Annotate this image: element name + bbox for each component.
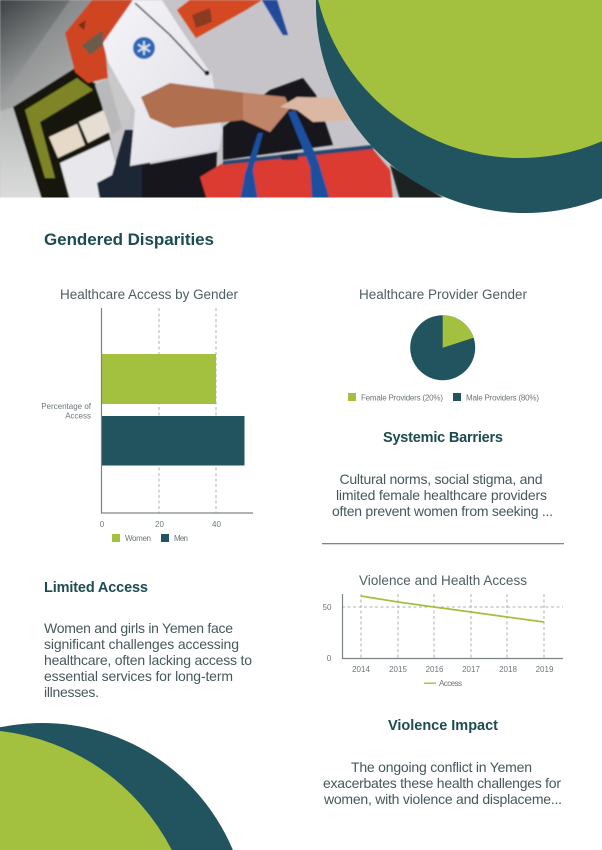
text block: Limited Access: illnesses. — [44, 684, 99, 700]
axis label: Access — [65, 412, 91, 420]
legend — [112, 534, 188, 543]
chart title: Violence and Health Access — [359, 573, 527, 588]
axis ticks: 20 — [155, 520, 164, 529]
text block: Violence Impact: The ongoing conflict in Yemen — [351, 759, 532, 775]
x ticks: 2015 — [389, 665, 407, 674]
bottom-left decorative circles — [0, 723, 233, 850]
y ticks: 50 — [323, 603, 332, 612]
legend: Women — [125, 534, 151, 543]
legend — [424, 679, 462, 688]
axis ticks: 40 — [212, 520, 221, 529]
x ticks: 2018 — [499, 665, 517, 674]
text block: Limited Access — [44, 620, 252, 700]
heading: Gendered Disparities: Gendered Disparities — [44, 230, 214, 249]
axis label — [41, 402, 92, 420]
pie chart: Healthcare Provider Gender — [348, 287, 539, 402]
bar: Men — [102, 416, 244, 466]
x ticks: 2014 — [352, 665, 370, 674]
text block: Limited Access: Women and girls in Yemen face — [44, 620, 233, 636]
photo: paramedic handing over a medical bag — [0, 0, 446, 198]
text block: Limited Access: significant challenges accessing — [44, 636, 239, 652]
heading: Systemic Barriers: Systemic Barriers — [383, 430, 503, 446]
legend: Male Providers (80%) — [466, 394, 539, 402]
slice: female providers — [443, 315, 474, 348]
y ticks — [323, 603, 332, 663]
axis ticks: 0 — [100, 520, 105, 529]
y ticks: 0 — [327, 654, 332, 663]
bar: Women — [102, 354, 216, 404]
line chart: Violence and Health Access — [323, 573, 563, 688]
text block: Limited Access: healthcare, often lacking access to — [44, 652, 252, 668]
axis label: Percentage of — [41, 402, 92, 411]
top-right decorative circles — [316, 0, 602, 213]
heading: Limited Access: Limited Access — [44, 580, 148, 596]
chart title: Healthcare Access by Gender — [60, 287, 238, 302]
bar chart: Healthcare Access by Gender — [41, 287, 253, 543]
heading: Violence Impact: Violence Impact — [388, 718, 498, 734]
text block: Violence Impact: exacerbates these health challenges for — [323, 775, 561, 791]
text block: Systemic Barriers: limited female healthcare providers — [336, 487, 547, 503]
text block: Violence Impact: women, with violence and displaceme... — [323, 791, 562, 807]
x ticks: 2019 — [536, 665, 554, 674]
text block: Violence Impact — [323, 759, 562, 807]
x ticks: 2016 — [426, 665, 444, 674]
axis ticks — [100, 520, 221, 529]
text block: Systemic Barriers: Cultural norms, social stigma, and — [340, 471, 542, 487]
legend — [348, 393, 539, 402]
x ticks — [352, 665, 554, 674]
text block: Systemic Barriers: often prevent women from seeking ... — [332, 503, 553, 519]
data line: Access — [361, 596, 544, 622]
legend: Men — [174, 534, 188, 543]
chart title: Healthcare Provider Gender — [359, 287, 528, 302]
text block: Limited Access: essential services for long-term — [44, 668, 233, 684]
text block: Systemic Barriers — [332, 471, 553, 519]
legend: Access — [439, 679, 462, 688]
legend: Female Providers (20%) — [361, 394, 443, 402]
x ticks: 2017 — [462, 665, 480, 674]
